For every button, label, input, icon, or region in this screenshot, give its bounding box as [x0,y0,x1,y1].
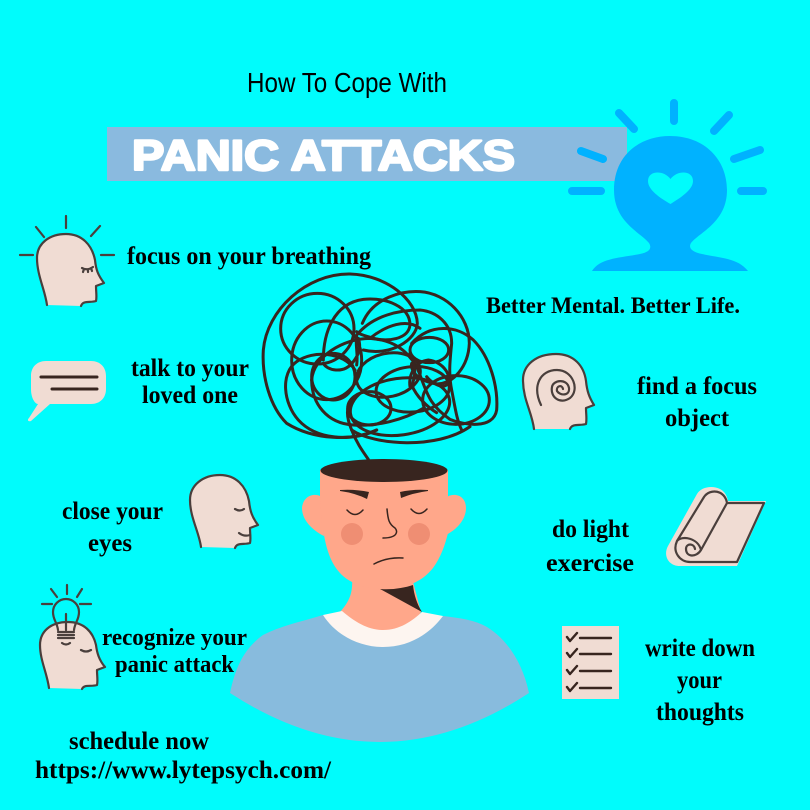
text: do light exercise: exercise [546,550,634,577]
illustration: man with open head [230,459,529,742]
icon: checklist [562,626,619,699]
text: write down your thoughts: thoughts [656,699,744,726]
neck [338,578,421,636]
text: recognize your panic attack: recognize your [102,625,247,651]
icon: profile head with closed eye and smile [190,475,258,548]
text: focus on your breathing: focus on your breathing [127,243,371,270]
text: close your eyes: eyes [88,530,132,557]
text: find a focus object: object [665,405,730,432]
text: schedule now and website [35,728,332,784]
text: write down your thoughts: your [677,667,722,694]
text: do light exercise: do light [552,516,630,543]
text: do light exercise [546,516,634,577]
text: find a focus object: find a focus [637,373,757,400]
text: talk to your loved one: talk to your [131,355,249,382]
shirt [230,615,529,742]
text: write down your thoughts: write down [645,635,755,662]
text: recognize your panic attack: panic attack [115,652,235,678]
icon: blue head with heart and rays [572,103,763,271]
face [320,470,448,589]
neck shadow [380,585,422,612]
icon: head with light bulb [40,585,105,689]
title banner [107,127,627,181]
eyes nose mouth [347,509,427,564]
text: talk to your loved one [131,355,249,409]
icon: tangled thought scribble [263,274,497,459]
cheeks [341,523,430,545]
icon: head with spiral [523,354,594,429]
ears [302,495,466,536]
icon: head with closed eye and rays [20,216,114,306]
text: better mental better life: Better Mental. Better Life. [486,293,740,318]
eyebrows [340,490,428,499]
text: close your eyes [62,498,163,557]
text: find a focus object [637,373,757,432]
text: recognize your panic attack [102,625,247,678]
icon: speech bubble [28,361,106,421]
banner heading: panic attacks: PANIC ATTACKS [132,132,515,180]
icon: yoga mat scroll [666,487,766,566]
collar [323,611,443,647]
text: write down your thoughts [645,635,755,726]
title line: how to cope with: How To Cope With [247,67,447,98]
open head top [320,459,448,482]
text: schedule now and website: schedule now [69,728,209,755]
text: schedule now and website: https://www.lytepsych.com/ [35,757,332,784]
text: close your eyes: close your [62,498,163,525]
text: talk to your loved one: loved one [142,382,238,409]
